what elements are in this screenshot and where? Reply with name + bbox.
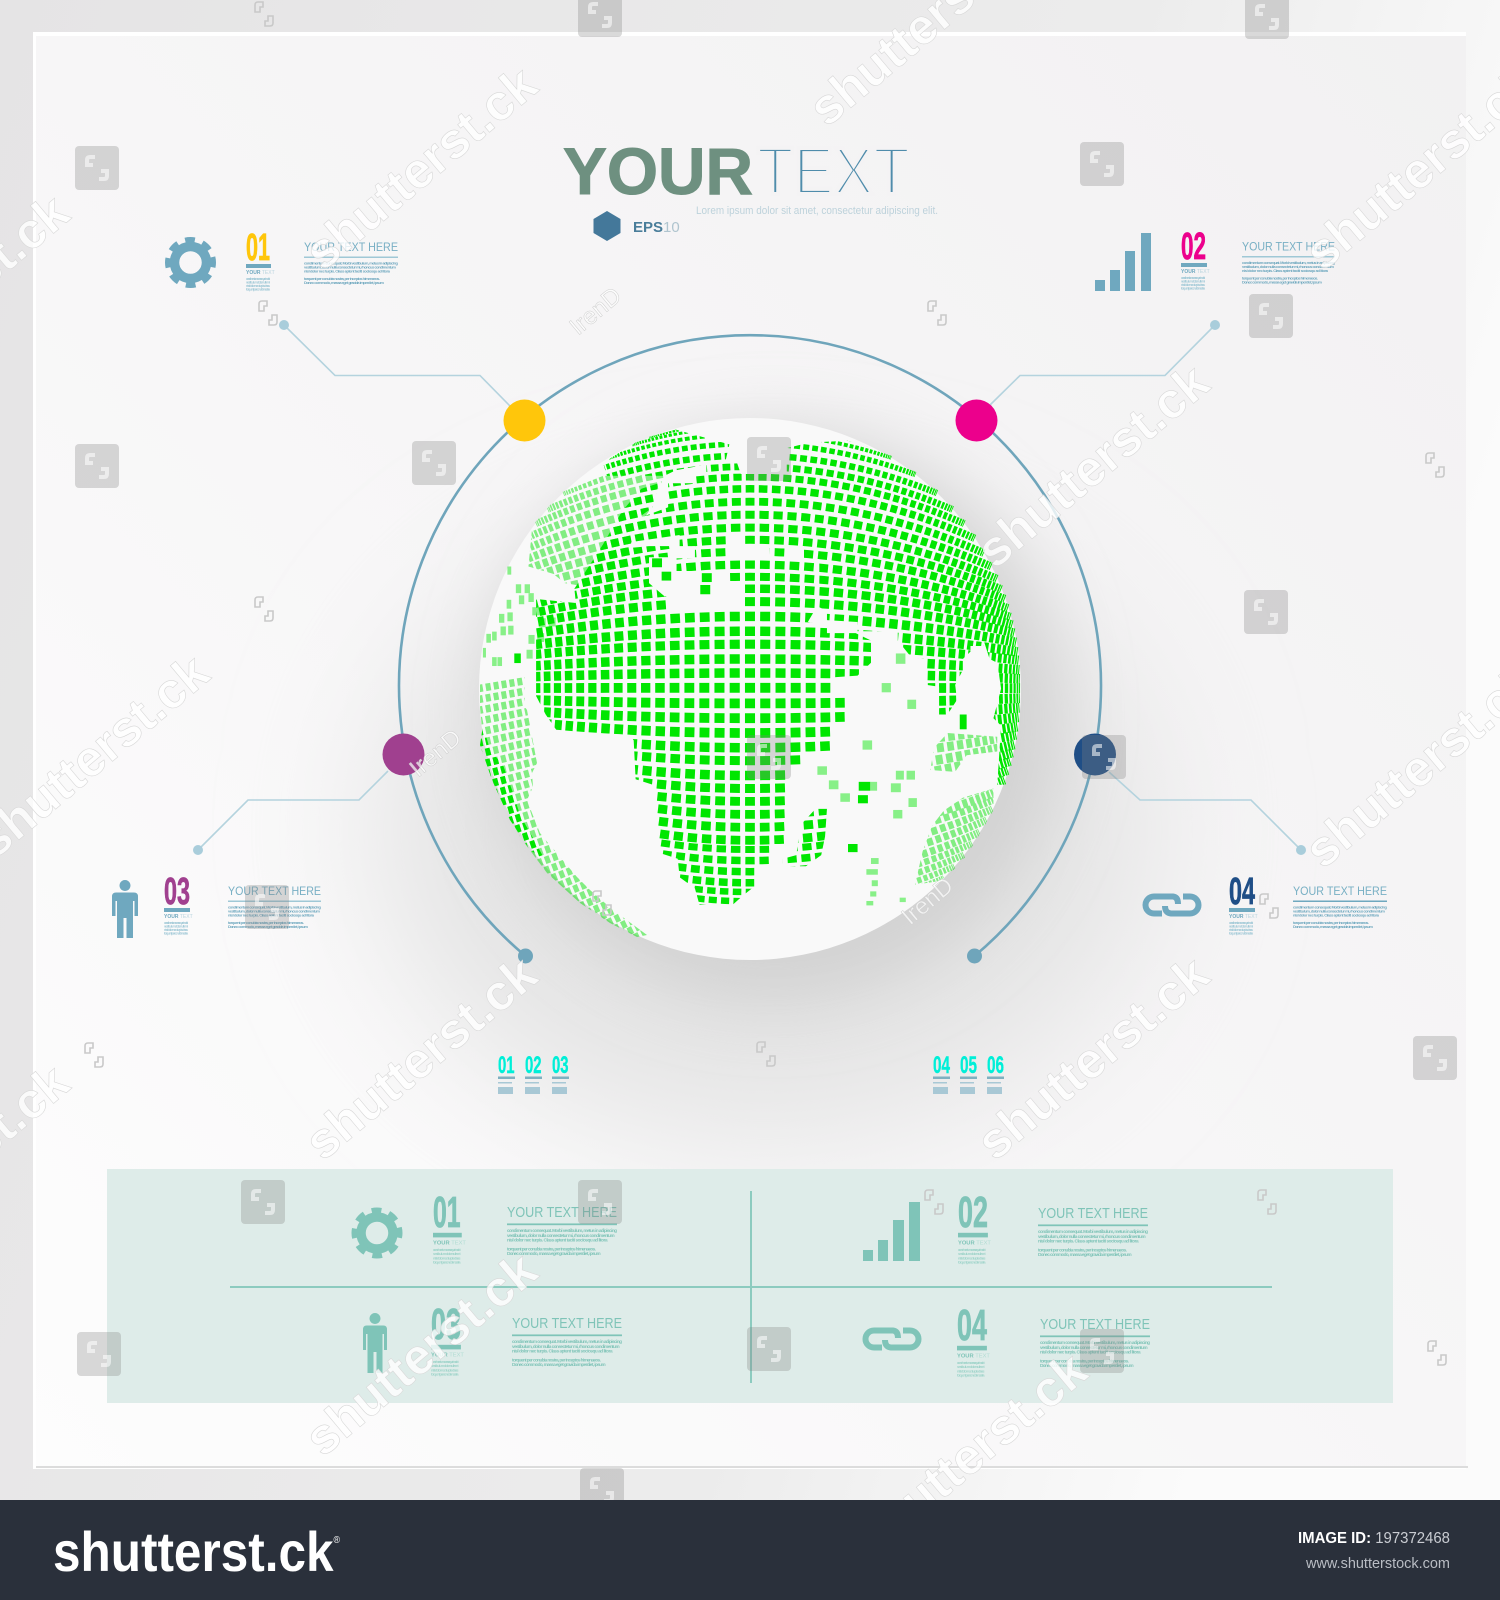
watermark: small logos — [85, 2, 1446, 1365]
node purple — [382, 734, 424, 776]
text block 4: YOUR TEXT HERE — [1293, 884, 1387, 898]
text block 2: Donec commodo, massa eget gravida imperdiet, ipsum — [1038, 1252, 1132, 1257]
icon: gear — [356, 1212, 398, 1254]
number block 02: vestibulum dolor nulla mi — [1181, 280, 1205, 284]
number block 02: torquent per conubia nostra — [958, 1259, 986, 1264]
text block 1 — [304, 240, 399, 285]
number block 04 — [1229, 871, 1258, 936]
text block 2 — [1242, 240, 1336, 284]
watermark: shutterstock text: IrenD — [405, 724, 467, 783]
text block 2: condimentum consequat. Morbi vestibulum, metus in adipiscing — [1242, 260, 1336, 265]
text block 2: torquent per conubia nostra, per inceptos himenaeos. — [1242, 276, 1318, 280]
number block 04: condimentum consequat morbi — [957, 1360, 985, 1365]
text block 1: nisl dolor nec turpis. Class aptent taciti sociosqu ad litora — [304, 268, 391, 274]
ring end dot right — [967, 948, 982, 964]
number block 01: 01 — [246, 227, 270, 269]
panel: bottom summary — [107, 1169, 1393, 1403]
connector: item 4 — [1109, 772, 1306, 855]
watermark: shutterstock text: shutterst.ck — [294, 945, 547, 1170]
text block 4: condimentum consequat. Morbi vestibulum, metus in adipiscing — [1293, 904, 1388, 910]
text block 2: condimentum consequat. Morbi vestibulum, metus in adipiscing — [1038, 1229, 1148, 1234]
title — [563, 134, 910, 209]
text block 4: torquent per conubia nostra, per inceptos himenaeos. — [1293, 920, 1369, 925]
text block 4: torquent per conubia nostra, per inceptos himenaeos. — [1040, 1358, 1129, 1363]
number block 04: condimentum consequat morbi — [1229, 921, 1253, 925]
node yellow — [504, 400, 546, 442]
footer url: www.shutterstock.com — [1305, 1555, 1450, 1572]
text block 3: torquent per conubia nostra, per inceptos himenaeos. — [512, 1357, 601, 1362]
watermark: shutterstock text: shutterst.ck — [966, 353, 1219, 578]
icon: bars — [863, 1202, 920, 1261]
number block 03 — [164, 871, 193, 936]
text block 4: Donec commodo, massa eget gravida imperdiet, ipsum — [1040, 1363, 1134, 1368]
number block 02: YOUR TEXT — [958, 1240, 991, 1246]
small numbers 01 02 03: 02 — [525, 1052, 542, 1079]
text block 3: vestibulum, dolor nulla consectetur mi, rhoncus condimentum — [228, 908, 320, 914]
icon: person 3 — [112, 880, 138, 938]
small numbers 01 02 03 — [498, 1052, 569, 1094]
number block 04: nisl dolor nec turpis class — [1229, 928, 1253, 932]
number block 01: vestibulum dolor nulla mi — [433, 1251, 461, 1256]
number block 01: nisl dolor nec turpis class — [433, 1255, 461, 1260]
text block 3 — [512, 1316, 622, 1367]
footer bar — [0, 1500, 1500, 1600]
text block 4 — [1040, 1317, 1150, 1368]
text block 1: condimentum consequat. Morbi vestibulum, metus in adipiscing — [507, 1228, 617, 1233]
small numbers 04 05 06: 04 — [933, 1052, 950, 1079]
number block 01 — [433, 1188, 466, 1264]
text block 3: vestibulum, dolor nulla consectetur mi, rhoncus condimentum — [512, 1344, 620, 1349]
watermark: shutterstock text: IrenD — [897, 872, 959, 931]
number block 02: vestibulum dolor nulla mi — [958, 1251, 986, 1256]
small numbers 04 05 06: 06 — [987, 1052, 1004, 1079]
number block 03: condimentum consequat morbi — [164, 921, 188, 925]
text block 1: torquent per conubia nostra, per inceptos himenaeos. — [507, 1246, 596, 1251]
number block 01: vestibulum dolor nulla mi — [246, 280, 270, 284]
watermark: shutterstock text: shutterst.ck — [844, 1341, 1097, 1566]
number block 03: nisl dolor nec turpis class — [431, 1367, 459, 1372]
text block 3: condimentum consequat. Morbi vestibulum, metus in adipiscing — [512, 1339, 622, 1344]
number block 04: YOUR TEXT — [957, 1353, 990, 1359]
number block 04: 04 — [957, 1301, 987, 1350]
number block 02 — [1181, 226, 1210, 290]
number block 03: vestibulum dolor nulla mi — [164, 924, 188, 928]
watermark: shutterstock text: shutterst.ck — [294, 55, 547, 280]
connector: item 1 — [279, 320, 510, 406]
text block 1: Donec commodo, massa eget gravida imperdiet, ipsum — [304, 280, 384, 285]
number block 03 — [431, 1300, 464, 1376]
number block 04: torquent per conubia nostra — [957, 1372, 985, 1377]
text block 3: Donec commodo, massa eget gravida imperdiet, ipsum — [228, 924, 308, 929]
watermark: shutterstock text: shutterst.ck — [966, 945, 1219, 1170]
text block 1: torquent per conubia nostra, per inceptos himenaeos. — [304, 276, 380, 281]
number block 04: 04 — [1229, 871, 1255, 913]
text block 1: YOUR TEXT HERE — [507, 1205, 617, 1221]
number block 03: 03 — [164, 871, 190, 913]
number block 02: torquent per conubia nostra — [1181, 286, 1205, 290]
number block 03: vestibulum dolor nulla mi — [431, 1363, 459, 1368]
text block 2 — [1038, 1206, 1148, 1257]
text block 2: vestibulum, dolor nulla consectetur mi, rhoncus condimentum — [1038, 1234, 1146, 1239]
number block 01: 01 — [433, 1188, 461, 1237]
text block 4: Donec commodo, massa eget gravida imperdiet, ipsum — [1293, 924, 1373, 929]
number block 01: YOUR TEXT — [246, 270, 275, 276]
number block 03: nisl dolor nec turpis class — [164, 928, 188, 932]
number block 04: torquent per conubia nostra — [1229, 932, 1253, 936]
number block 02 — [958, 1188, 991, 1264]
text block 2: torquent per conubia nostra, per inceptos himenaeos. — [1038, 1247, 1127, 1252]
number block 02: condimentum consequat morbi — [958, 1247, 986, 1252]
number block 04: YOUR TEXT — [1229, 914, 1258, 920]
footer image id: IMAGE ID: 197372468 — [1298, 1530, 1450, 1547]
number block 01: torquent per conubia nostra — [433, 1259, 461, 1264]
title: TEXT — [757, 134, 910, 209]
icon: bars 2 — [1095, 233, 1151, 291]
tagline: Lorem ipsum dolor sit amet, consectetur adipiscing elit. — [696, 205, 938, 217]
text block 2: YOUR TEXT HERE — [1038, 1206, 1148, 1222]
number block 01: torquent per conubia nostra — [246, 288, 270, 292]
text block 3: YOUR TEXT HERE — [228, 884, 321, 898]
ring end dot left — [518, 948, 533, 964]
text block 1: YOUR TEXT HERE — [304, 240, 398, 254]
text block 4: condimentum consequat. Morbi vestibulum, metus in adipiscing — [1040, 1340, 1150, 1345]
text block 4: vestibulum, dolor nulla consectetur mi, rhoncus condimentum — [1293, 908, 1385, 914]
number block 01: condimentum consequat morbi — [433, 1247, 461, 1252]
small numbers 04 05 06: 05 — [960, 1052, 977, 1079]
globe shadow — [375, 430, 1155, 1140]
text block 3: nisl dolor nec turpis. Class aptent taciti sociosqu ad litora — [228, 912, 315, 918]
number block 03: YOUR TEXT — [164, 914, 193, 920]
small numbers 01 02 03: 03 — [552, 1052, 568, 1079]
title: YOUR — [563, 134, 753, 208]
number block 03: YOUR TEXT — [431, 1352, 464, 1358]
watermark: shutterstock text: IrenD — [565, 282, 627, 341]
text block 3: torquent per conubia nostra, per inceptos himenaeos. — [228, 920, 304, 925]
number block 02: 02 — [958, 1188, 988, 1237]
text block 2: nisl dolor nec turpis. Class aptent taciti sociosqu ad litora — [1242, 268, 1329, 273]
watermark: shutterstock text: shutterst.ck — [294, 1241, 547, 1466]
number block 02: YOUR TEXT — [1181, 269, 1210, 275]
EPS label: EPS10 — [633, 219, 680, 236]
number block 01: nisl dolor nec turpis class — [246, 284, 270, 288]
globe — [479, 418, 1021, 960]
text block 3: YOUR TEXT HERE — [512, 1316, 622, 1332]
connector: item 3 — [193, 771, 388, 855]
number block 01: condimentum consequat morbi — [246, 277, 270, 281]
number block 03: 03 — [431, 1300, 461, 1349]
number block 01 — [246, 227, 275, 292]
number block 02: condimentum consequat morbi — [1181, 276, 1205, 280]
text block 1: condimentum consequat. Morbi vestibulum, metus in adipiscing — [304, 260, 399, 266]
number block 04: nisl dolor nec turpis class — [957, 1368, 985, 1373]
footer logo: shutterst.ck — [53, 1520, 370, 1583]
connector: item 2 — [990, 320, 1220, 405]
number block 04: vestibulum dolor nulla mi — [957, 1364, 985, 1369]
text block 4: nisl dolor nec turpis. Class aptent taciti sociosqu ad litora — [1293, 912, 1380, 918]
number block 02: nisl dolor nec turpis class — [1181, 283, 1205, 287]
icon: person — [363, 1313, 387, 1373]
text block 2: nisl dolor nec turpis. Class aptent taciti sociosqu ad litora — [1038, 1239, 1139, 1244]
icon: link — [866, 1330, 918, 1348]
text block 3: nisl dolor nec turpis. Class aptent taciti sociosqu ad litora — [512, 1349, 613, 1354]
number block 03: torquent per conubia nostra — [431, 1371, 459, 1376]
number block 04 — [957, 1301, 990, 1377]
number block 03: condimentum consequat morbi — [431, 1359, 459, 1364]
text block 1: Donec commodo, massa eget gravida imperdiet, ipsum — [507, 1251, 601, 1256]
footer logo: ® — [333, 1535, 341, 1546]
orbit ring — [399, 335, 1101, 956]
text block 2: YOUR TEXT HERE — [1242, 240, 1335, 254]
text block 3 — [228, 884, 322, 929]
number block 03: torquent per conubia nostra — [164, 932, 188, 936]
text block 1 — [507, 1205, 617, 1256]
text block 4: vestibulum, dolor nulla consectetur mi, rhoncus condimentum — [1040, 1345, 1148, 1350]
number block 04: vestibulum dolor nulla mi — [1229, 924, 1253, 928]
text block 3: Donec commodo, massa eget gravida imperdiet, ipsum — [512, 1362, 606, 1367]
text block 4: nisl dolor nec turpis. Class aptent taciti sociosqu ad litora — [1040, 1350, 1141, 1355]
node navy — [1074, 734, 1116, 776]
text block 1: nisl dolor nec turpis. Class aptent taciti sociosqu ad litora — [507, 1238, 608, 1243]
text block 1: vestibulum, dolor nulla consectetur mi, rhoncus condimentum — [304, 264, 396, 270]
number block 02: 02 — [1181, 226, 1206, 268]
icon: hexagon — [594, 211, 620, 241]
small numbers 01 02 03: 01 — [498, 1052, 514, 1079]
icon: gear 1 — [169, 241, 212, 284]
number block 01: YOUR TEXT — [433, 1240, 466, 1246]
text block 3: condimentum consequat. Morbi vestibulum, metus in adipiscing — [228, 904, 322, 910]
text block 2: Donec commodo, massa eget gravida imperdiet, ipsum — [1242, 280, 1322, 284]
node magenta — [956, 400, 998, 442]
text block 4: YOUR TEXT HERE — [1040, 1317, 1150, 1333]
text block 1: vestibulum, dolor nulla consectetur mi, rhoncus condimentum — [507, 1233, 615, 1238]
text block 2: vestibulum, dolor nulla consectetur mi, rhoncus condimentum — [1242, 264, 1334, 269]
text block 4 — [1293, 884, 1388, 929]
small numbers 04 05 06 — [933, 1052, 1004, 1094]
number block 02: nisl dolor nec turpis class — [958, 1255, 986, 1260]
icon: link 4 — [1146, 896, 1198, 914]
